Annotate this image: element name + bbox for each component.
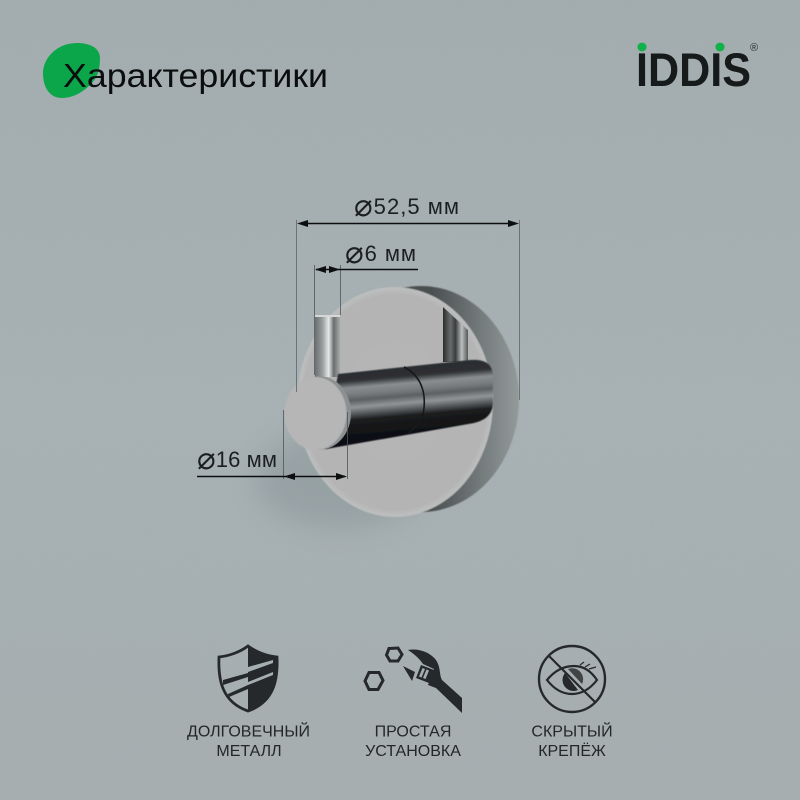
bar end rim xyxy=(289,376,351,450)
mount disc xyxy=(297,287,493,517)
label: ⌀ xyxy=(197,441,216,476)
extension lines xyxy=(296,220,520,400)
registered mark: ® xyxy=(750,42,758,54)
label: 6 мм xyxy=(365,241,416,266)
extension lines xyxy=(314,265,340,375)
label: ПРОСТАЯ xyxy=(375,724,451,740)
label: 16 мм xyxy=(216,447,277,472)
label: ⌀ xyxy=(354,188,373,223)
icon: shield xyxy=(219,646,277,711)
arrowheads xyxy=(297,220,519,227)
arrowheads xyxy=(284,473,347,480)
bar seam xyxy=(404,367,424,433)
rear pin xyxy=(443,307,468,362)
dimension: 6 mm diameter xyxy=(314,235,418,375)
label line 2: КРЕПЁЖ xyxy=(538,742,606,760)
feature: easy installation xyxy=(365,648,462,760)
label line 2: МЕТАЛЛ xyxy=(216,743,282,760)
dimension: 52,5 mm diameter xyxy=(296,188,520,400)
icon: wrench adjuster xyxy=(416,665,434,683)
label: ⌀ xyxy=(345,235,364,270)
logo green dots xyxy=(637,43,725,51)
extension lines xyxy=(284,410,348,479)
title text: Характеристики xyxy=(63,57,328,94)
logo: IDDIS xyxy=(636,42,758,96)
icon: wrench xyxy=(408,649,462,713)
feature: durable metal xyxy=(187,646,310,760)
logo wordmark: IDDIS xyxy=(636,43,751,96)
front pin xyxy=(315,315,340,377)
label line 2: УСТАНОВКА xyxy=(365,743,461,760)
arrow line xyxy=(316,268,418,270)
label: ДОЛГОВЕЧНЫЙ xyxy=(187,722,310,740)
feature: hidden fastening xyxy=(531,646,613,760)
icon: crossed-out eye xyxy=(539,646,605,712)
arrow line xyxy=(197,476,345,478)
icon: wrench lower jaw xyxy=(403,666,415,681)
green blob xyxy=(43,43,100,98)
product photo: round wall hook xyxy=(255,286,519,528)
arrow line xyxy=(300,222,516,224)
hook shadow xyxy=(255,432,425,528)
icon: nuts xyxy=(365,648,402,690)
arrowheads xyxy=(315,266,340,273)
label: 52,5 мм xyxy=(374,194,459,219)
bar end cap xyxy=(284,377,346,450)
label: СКРЫТЫЙ xyxy=(531,722,613,740)
dimension: 16 mm diameter xyxy=(197,410,348,480)
hook bar xyxy=(323,360,493,449)
mount rim xyxy=(323,286,519,512)
infographic canvas xyxy=(43,42,758,756)
heading: Характеристики xyxy=(43,43,328,98)
